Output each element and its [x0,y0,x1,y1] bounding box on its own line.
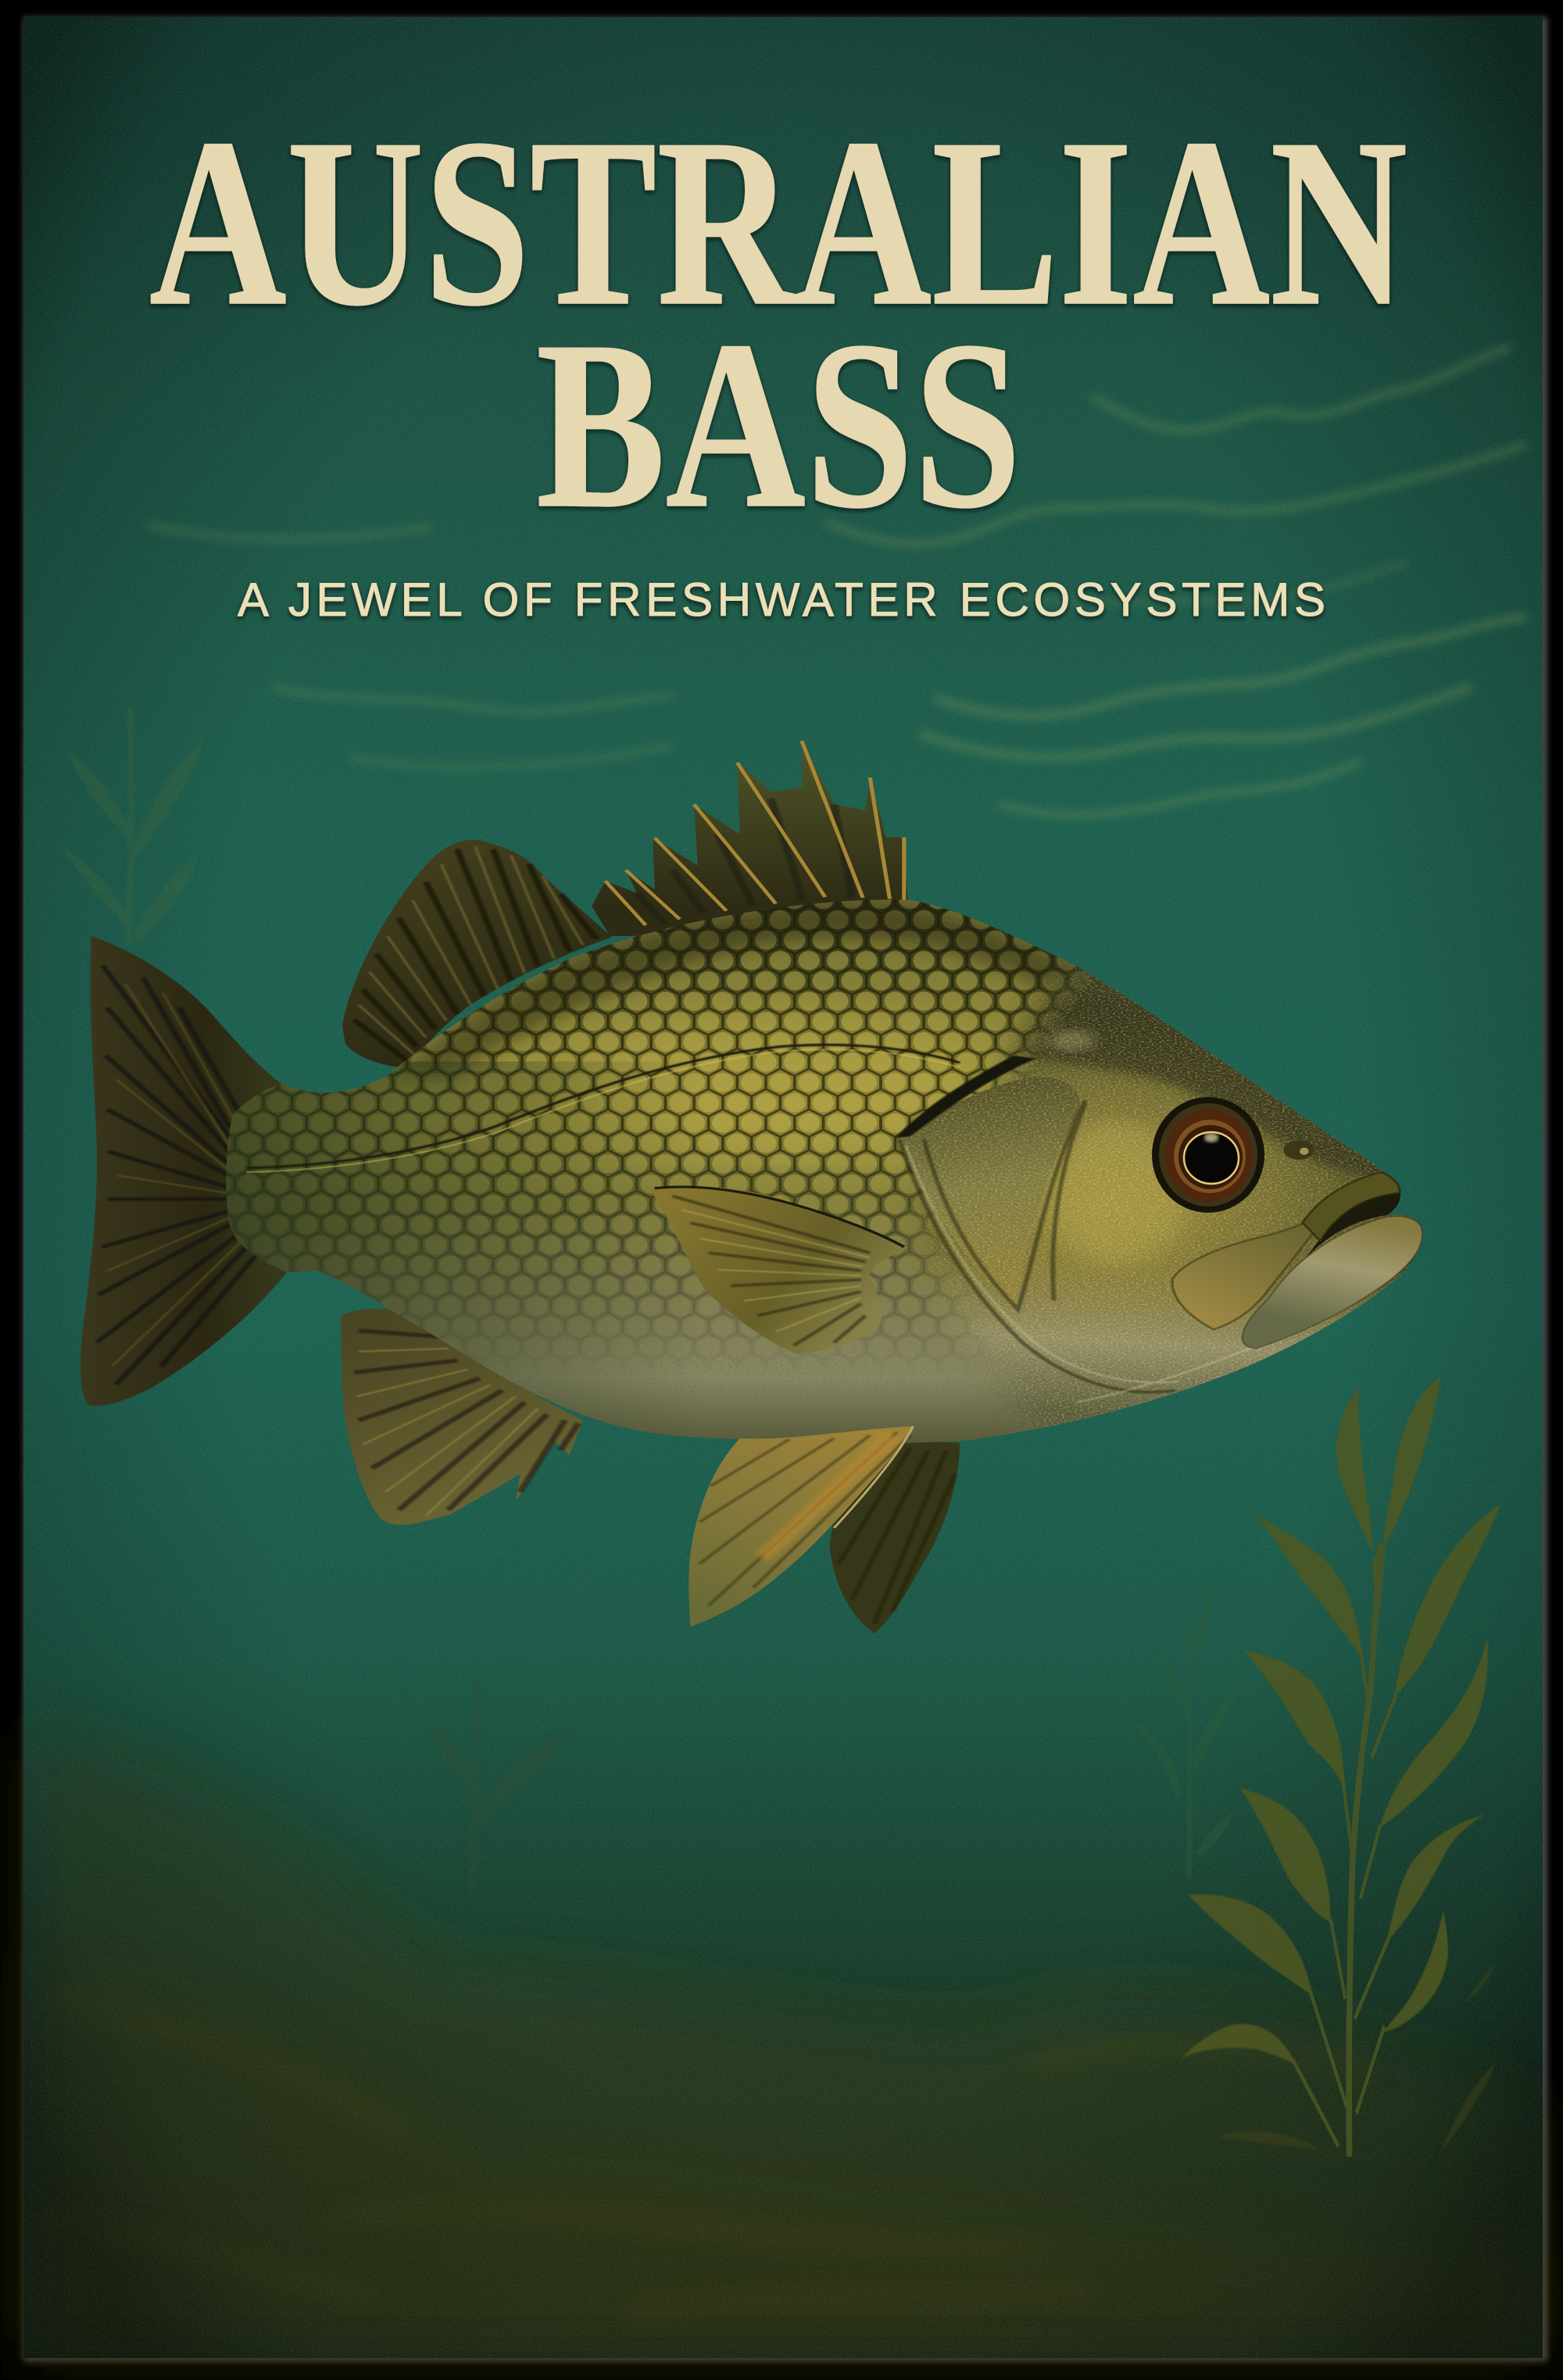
head details [895,1056,1422,1403]
faint background plant: upper left [63,707,205,945]
gill plate lines [899,1100,1175,1392]
water ripples [148,348,1524,815]
upper lip [1303,1172,1400,1241]
body [227,899,1422,1442]
aquatic plant [1181,1377,1500,2157]
nostril [1283,1141,1314,1160]
leaf stalks [1293,1543,1397,2146]
fin: spiny dorsal [592,741,907,936]
lowest faded leaves [1217,1962,1496,2153]
fin: rear ventral [830,1438,960,1633]
lower jaw [1243,1217,1422,1349]
tail peduncle shade [197,1062,709,1474]
head top shade [996,993,1408,1187]
lateral line [246,1045,960,1168]
faint background plant: lower right [1127,1583,1239,1878]
mouth opening [1305,1187,1400,1259]
fin: pectoral [650,1186,907,1355]
eye [1152,1097,1264,1213]
eye socket [1152,1097,1264,1213]
title line: Bass: BASS [536,291,1021,558]
pupil highlight [1204,1133,1218,1142]
belly stipple [457,1241,1139,1444]
pupil [1184,1132,1239,1184]
head colouring [888,942,1462,1456]
faint background plant: lower centre [426,1680,570,1891]
fin: soft dorsal [342,840,612,1067]
plant stem [1349,1543,1380,2157]
fin: anal [341,1309,583,1525]
leaves [1181,1377,1500,2066]
gill gap shadow [895,1056,1036,1138]
seabed streaks [47,2000,1375,2313]
seabed mounds [23,1735,1543,2358]
scale pattern [227,899,1089,1355]
title [149,89,1407,558]
fish [80,741,1462,1633]
subtitle: A JEWEL OF FRESHWATER ECOSYSTEMS [238,574,1325,626]
golden shoulder highlight [583,1008,996,1151]
iris [1165,1110,1253,1202]
fin: front ventral [689,1426,913,1627]
opercle highlight [1049,1030,1095,1052]
cheek gold wash [1045,1121,1189,1265]
back shadow [390,902,1076,1080]
head speckle [888,942,1462,1456]
gill plate [888,1067,1094,1319]
maxilla [1172,1211,1328,1329]
fin: tail [80,936,287,1406]
